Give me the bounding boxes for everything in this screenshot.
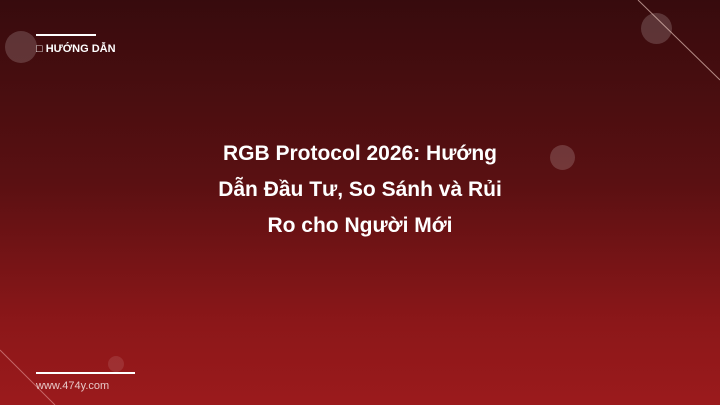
title: RGB Protocol 2026: Hướng	[223, 142, 497, 165]
footer url: www.474y.com	[36, 380, 109, 392]
title: Dẫn Đầu Tư, So Sánh và Rủi	[218, 178, 502, 201]
category label: □ HƯỚNG DẪN	[36, 43, 116, 55]
title: Ro cho Người Mới	[267, 214, 453, 237]
title	[218, 142, 502, 237]
